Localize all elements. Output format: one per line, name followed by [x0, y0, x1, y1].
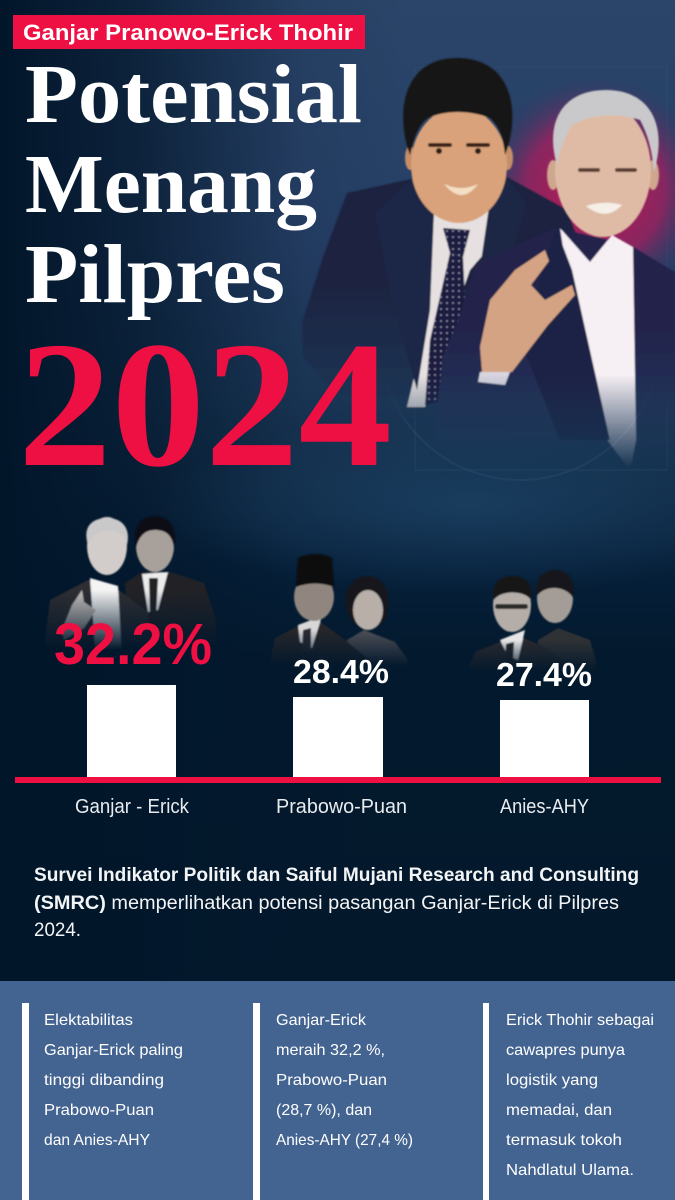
point 1: [22, 1003, 183, 1200]
tag: campaign pair name: Ganjar Pranowo-Erick Thohir: [23, 20, 353, 45]
point 2: [253, 1003, 413, 1200]
value: 28.4%: 28.4%: [293, 653, 389, 690]
survey description: 2024.: [34, 920, 81, 941]
point 3: logistik yang: [506, 1072, 598, 1089]
title: 2024: [18, 305, 392, 504]
figure: Ganjar Pranowo: [430, 90, 675, 470]
portrait: Ganjar and Erick: [46, 516, 216, 648]
category label: Anies-AHY: Anies-AHY: [500, 796, 589, 818]
value: 27.4%: 27.4%: [496, 656, 592, 693]
point 3: cawapres punya: [506, 1042, 625, 1059]
bar: Ganjar-Erick: [87, 685, 176, 777]
point 2: Anies-AHY (27,4 %): [276, 1132, 413, 1149]
title: Potensial: [25, 48, 362, 141]
point 2: Ganjar-Erick: [276, 1012, 367, 1029]
tag: campaign pair name: [13, 15, 365, 49]
survey description: Survei Indikator Politik dan Saiful Mujani Research and Consulting: [34, 865, 639, 886]
title: Menang: [25, 138, 317, 231]
bar: Anies-AHY: [500, 700, 589, 777]
bar: Prabowo-Puan: [293, 697, 383, 777]
point 2: meraih 32,2 %,: [276, 1042, 385, 1059]
figure: Erick Thohir: [302, 58, 600, 420]
point 3: memadai, dan: [506, 1102, 612, 1119]
point 1: dan Anies-AHY: [44, 1132, 150, 1149]
portrait: Anies and AHY: [470, 569, 596, 666]
hero image: Erick Thohir and Ganjar Pranowo: [302, 58, 675, 470]
point 1: Elektabilitas: [44, 1012, 133, 1029]
point 3: Erick Thohir sebagai: [506, 1012, 654, 1029]
survey description: (SMRC) memperlihatkan potensi pasangan Ganjar-Erick di Pilpres: [34, 893, 619, 914]
bar chart: electability: [15, 516, 661, 818]
point 1: tinggi dibanding: [44, 1072, 164, 1089]
point 3: termasuk tokoh: [506, 1132, 622, 1149]
point 3: [483, 1003, 654, 1200]
value: 32.2%: 32.2%: [54, 612, 212, 677]
portrait: Prabowo and Puan: [269, 554, 408, 670]
point 2: Prabowo-Puan: [276, 1072, 387, 1089]
category label: Prabowo-Puan: Prabowo-Puan: [276, 796, 407, 818]
survey description: [34, 865, 639, 941]
point 2: (28,7 %), dan: [276, 1102, 372, 1119]
axis line: [15, 777, 661, 783]
category label: Ganjar - Erick: Ganjar - Erick: [75, 796, 190, 818]
title: Pilpres: [25, 228, 285, 321]
point 3: Nahdlatul Ulama.: [506, 1162, 634, 1179]
panel: key points: [0, 981, 675, 1200]
point 1: Ganjar-Erick paling: [44, 1042, 183, 1059]
point 1: Prabowo-Puan: [44, 1102, 154, 1119]
title: [18, 48, 392, 504]
